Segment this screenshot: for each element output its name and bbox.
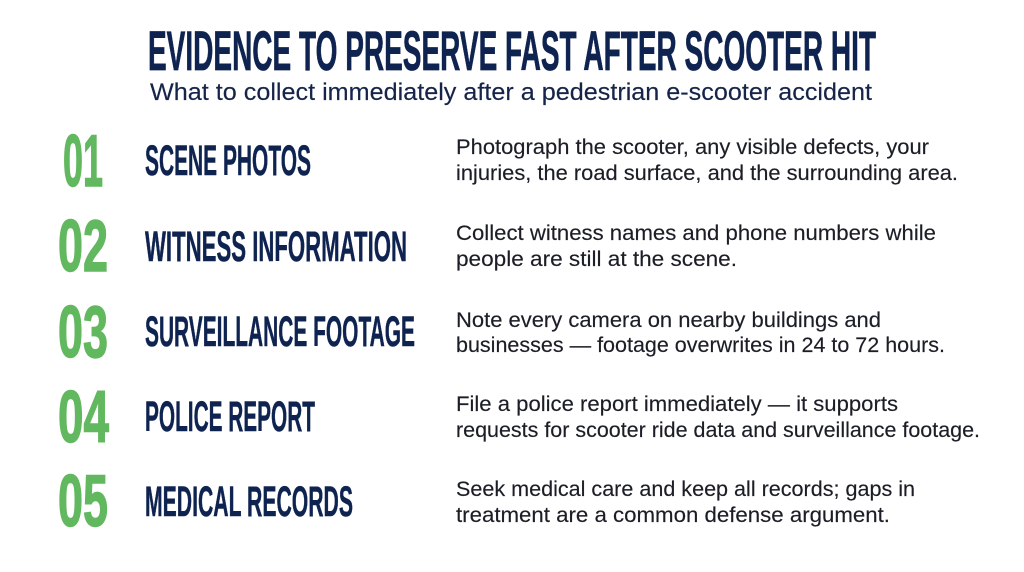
description: surveillance footage: businesses — footage overwrites in 24 to 72 hours.: [456, 333, 945, 357]
description: medical records: treatment are a common defense argument.: [456, 503, 890, 527]
description: medical records: [456, 477, 915, 527]
description: surveillance footage: Note every camera on nearby buildings and: [456, 308, 881, 332]
description: police report: File a police report immediately — it supports: [456, 392, 898, 416]
number 02: 02: [58, 206, 108, 287]
description: scene photos: injuries, the road surface, and the surrounding area.: [456, 161, 958, 185]
description: police report: requests for scooter ride data and surveillance footage.: [456, 418, 980, 442]
description: witness information: [456, 221, 936, 271]
item 04: police report: [58, 377, 980, 458]
number 05: 05: [58, 461, 108, 542]
description: surveillance footage: [456, 308, 945, 357]
item 03: surveillance footage: [58, 292, 945, 373]
subtitle: What to collect immediately after a pedestrian e-scooter accident: [150, 79, 872, 106]
item 01: scene photos: [63, 121, 958, 202]
number 04: 04: [58, 377, 109, 458]
description: police report: [456, 392, 980, 442]
header: [148, 20, 876, 106]
description: scene photos: [456, 135, 958, 185]
item 05: medical records: [58, 461, 915, 542]
item 01: scene photos: SCENE PHOTOS: [145, 138, 311, 185]
number 03: 03: [58, 292, 108, 373]
item 03: surveillance footage: SURVEILLANCE FOOTAGE: [145, 309, 415, 356]
description: medical records: Seek medical care and keep all records; gaps in: [456, 477, 915, 501]
description: scene photos: Photograph the scooter, any visible defects, your: [456, 135, 929, 159]
description: witness information: people are still at the scene.: [456, 247, 737, 271]
item 01: scene photos: 01: [63, 121, 103, 202]
item 02: witness information: [58, 206, 936, 287]
item 05: medical records: MEDICAL RECORDS: [145, 479, 353, 526]
heading: witness information: WITNESS INFORMATION: [145, 224, 407, 271]
item 04: police report: POLICE REPORT: [145, 394, 315, 441]
description: witness information: Collect witness names and phone numbers while: [456, 221, 936, 245]
